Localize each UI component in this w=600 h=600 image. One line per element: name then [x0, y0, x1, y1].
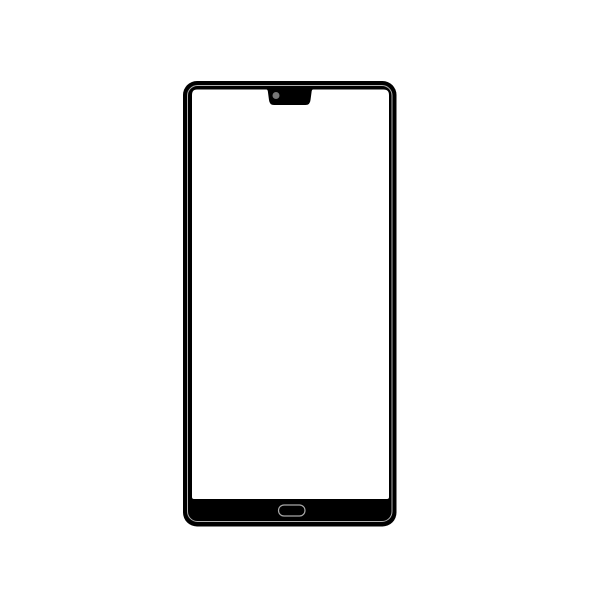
icon: home button: [278, 505, 305, 516]
inner bezel outline: [188, 86, 392, 522]
screen with notch: [192, 90, 389, 499]
icon: front camera: [272, 92, 280, 99]
phone body: [183, 81, 396, 526]
